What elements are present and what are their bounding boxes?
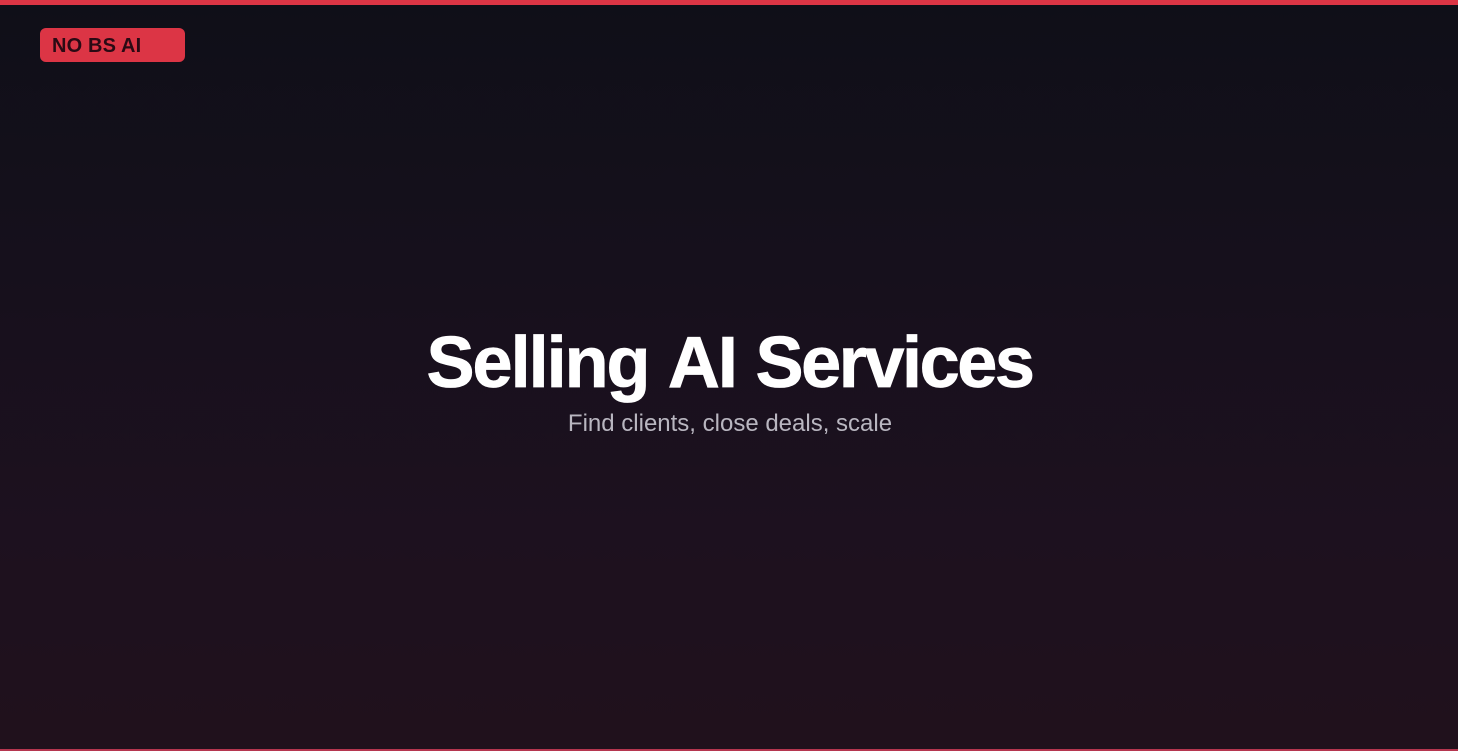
subtitle: Find clients, close deals, scale: [568, 410, 892, 437]
bottom accent bar: [0, 749, 1458, 751]
badge: NO BS AI: [40, 28, 185, 62]
top accent bar: [0, 0, 1458, 5]
title: Selling AI Services: [426, 323, 1033, 403]
badge text: NO BS AI: [52, 35, 141, 57]
